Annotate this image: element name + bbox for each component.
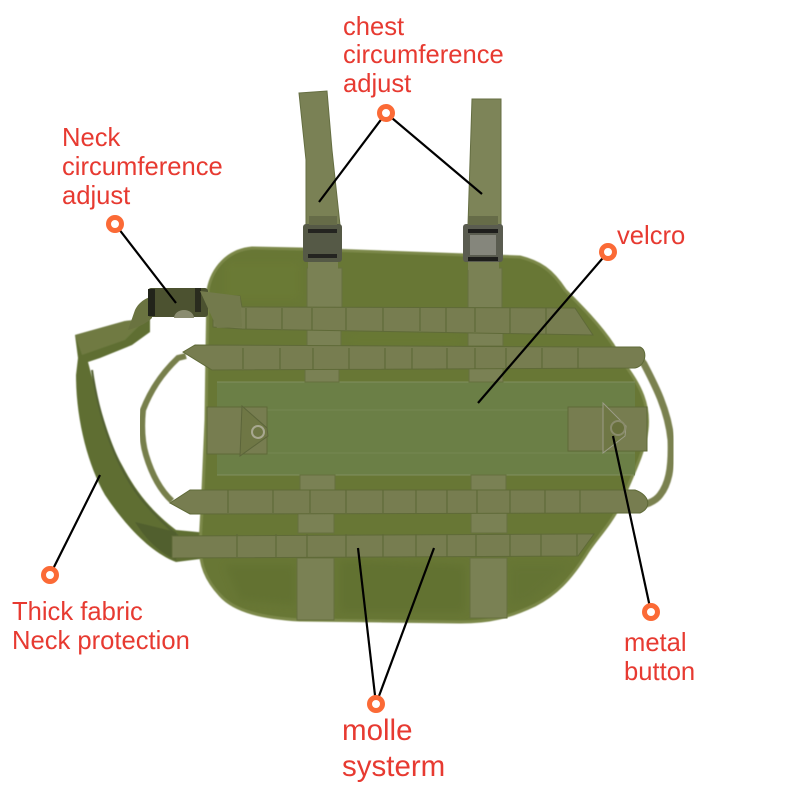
vest body: [200, 248, 648, 622]
label: metal button: metal: [624, 629, 687, 657]
molle stitching: [228, 308, 580, 557]
marker: chest: [380, 106, 392, 120]
velcro panel: [217, 382, 635, 475]
right tab with ring: [568, 403, 647, 453]
label: chest circumference adjust: circumference: [343, 41, 504, 69]
label: metal button: button: [624, 658, 695, 686]
marker: thick fabric: [44, 568, 56, 582]
label: chest circumference adjust: adjust: [343, 70, 411, 98]
left tab with ring: [207, 406, 268, 456]
right handle loop: [625, 352, 671, 507]
label: neck circumference adjust: adjust: [62, 182, 130, 210]
marker: metal button: [644, 606, 658, 618]
body shading: [225, 262, 570, 612]
label: neck circumference adjust: circumference: [62, 153, 223, 181]
label: velcro: velcro: [617, 222, 685, 250]
vertical webbing straps: [297, 268, 507, 620]
horizontal molle webbing: [170, 295, 648, 558]
left chest buckle: [303, 216, 342, 270]
leader lines: [50, 113, 651, 704]
label: thick fabric neck protection: Thick fabric: [12, 598, 143, 626]
right chest buckle: [463, 216, 503, 270]
tactical dog vest photo: [75, 91, 671, 622]
label: thick fabric neck protection: Neck protection: [12, 627, 190, 655]
marker: velcro: [602, 246, 614, 258]
neck buckle: [128, 288, 242, 330]
marker: neck: [108, 218, 122, 230]
label: molle system: molle: [342, 714, 412, 747]
neck strap: [75, 318, 208, 562]
marker: molle: [370, 698, 382, 710]
label: chest circumference adjust: chest: [343, 13, 404, 41]
left handle loop: [142, 356, 186, 501]
label: molle system: systerm: [342, 750, 445, 783]
chest strap right: [468, 99, 501, 225]
label: neck circumference adjust: Neck: [62, 124, 121, 152]
chest strap left: [299, 91, 340, 225]
